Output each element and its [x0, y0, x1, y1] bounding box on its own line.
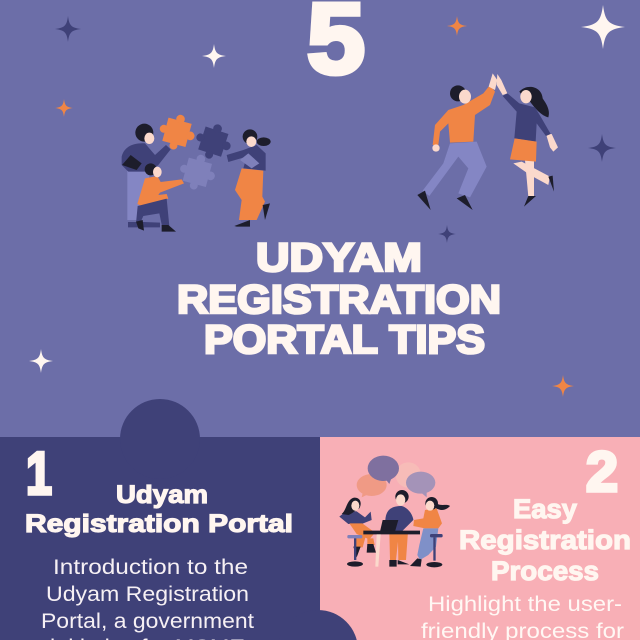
- puzzle pieces: [155, 110, 236, 194]
- illustration: team discussing at a table: [339, 456, 450, 567]
- body text: section 1: Udyam Registration: [46, 583, 249, 606]
- body text: section 1: Portal, a government: [41, 610, 254, 633]
- decorative stars: [29, 5, 625, 397]
- heading: Easy Registration Process: Process: [491, 556, 599, 586]
- illustration: two people high five: [417, 73, 558, 210]
- body text: section 1: Introduction to the: [53, 556, 248, 579]
- title: UDYAM: [256, 236, 422, 280]
- number 2: 2: [586, 440, 618, 504]
- illustration: team assembling puzzle: [122, 110, 271, 232]
- body text: section 1: [41, 556, 254, 640]
- title: [177, 236, 501, 362]
- heading: Udyam Registration Portal: Registration Portal: [25, 510, 293, 538]
- heading: Udyam Registration Portal: [25, 481, 293, 538]
- heading: Easy Registration Process: Registration: [459, 525, 631, 555]
- body text: section 2: Highlight the user-: [428, 593, 622, 616]
- number 1: 1: [26, 440, 52, 507]
- panel: dark section 1: [0, 399, 358, 640]
- body text: section 2: [421, 593, 624, 640]
- heading: Easy Registration Process: [459, 494, 631, 586]
- speech bubbles: [357, 456, 435, 497]
- title: PORTAL TIPS: [204, 318, 485, 362]
- panel: pink section 2: [320, 437, 640, 640]
- heading: Udyam Registration Portal: Udyam: [116, 481, 208, 509]
- title: REGISTRATION: [177, 278, 501, 322]
- heading: Easy Registration Process: Easy: [513, 494, 577, 524]
